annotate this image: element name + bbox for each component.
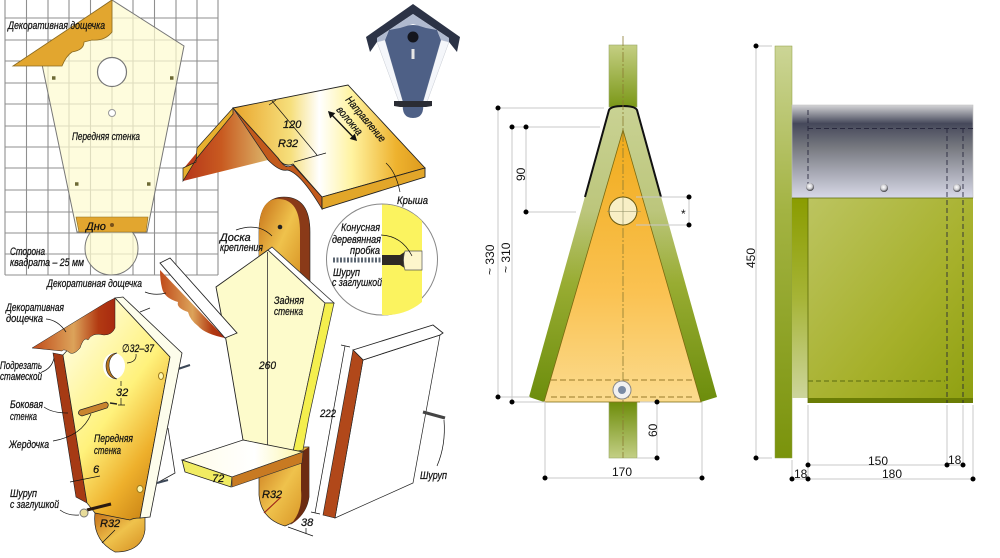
shelf top xyxy=(182,440,303,477)
label: 120: 120 xyxy=(283,119,302,131)
perch hole xyxy=(108,110,116,116)
hole interior xyxy=(106,353,117,379)
leader: roof xyxy=(386,163,400,192)
panel: back wall with mounting board xyxy=(182,197,334,536)
label: Декоративная дощечка xyxy=(45,278,142,290)
dimension 38 xyxy=(288,527,313,536)
plug xyxy=(404,251,422,270)
label: screw: Шуруп xyxy=(420,470,447,482)
panel: side view drawing xyxy=(744,46,973,481)
rounded foot xyxy=(95,513,145,552)
board thickness shading xyxy=(290,447,309,525)
magnifier circle xyxy=(326,204,438,315)
floor piece xyxy=(76,217,148,232)
label: screw: Шуруп xyxy=(10,488,37,500)
bolt xyxy=(613,381,631,399)
leader xyxy=(437,420,444,466)
light soffit xyxy=(377,14,449,42)
screw shank xyxy=(333,258,400,262)
label: screw 2: с заглушкой xyxy=(332,277,382,289)
orange panel xyxy=(544,130,701,402)
radius line xyxy=(102,530,115,543)
left strip xyxy=(792,198,808,398)
bolt core xyxy=(618,386,626,394)
panel: upper loose decorative plank xyxy=(45,258,237,338)
label: trim: Подрезать xyxy=(0,360,42,372)
roof thickness xyxy=(322,168,425,209)
label: front wall: Передняя стенка xyxy=(72,131,140,143)
label: screw 2: с заглушкой xyxy=(10,499,59,511)
roof top surface xyxy=(233,85,425,197)
floor screw xyxy=(110,223,114,227)
bolt 3 xyxy=(953,184,961,192)
dim 6 xyxy=(70,476,100,482)
dimension lines xyxy=(498,108,702,478)
white edge xyxy=(160,258,237,338)
perch xyxy=(78,402,108,416)
entrance hole xyxy=(103,353,125,379)
label: 450: 450 xyxy=(744,248,758,268)
label: grain direction: Направление xyxy=(343,94,388,145)
radius line xyxy=(264,497,281,513)
label: 260: 260 xyxy=(258,360,277,372)
leader: mounting board xyxy=(236,227,272,236)
label: roof: Крыша xyxy=(397,195,428,207)
shelf side xyxy=(232,452,303,487)
label: 18 right: 18 xyxy=(948,453,962,467)
white side boards xyxy=(377,40,449,102)
bolt 2 xyxy=(880,184,888,192)
back wall face xyxy=(216,250,325,452)
top edge xyxy=(353,325,443,360)
screw marks xyxy=(52,78,174,184)
leader xyxy=(53,414,91,441)
label: 38: 38 xyxy=(301,517,314,529)
white face xyxy=(335,335,440,518)
panel: blue birdhouse xyxy=(366,4,460,118)
panel: side wall part xyxy=(311,325,447,518)
top edge white xyxy=(268,247,334,303)
front face xyxy=(63,298,170,520)
mount top xyxy=(609,45,637,107)
roof front edge xyxy=(233,108,322,209)
label: perch: Жердочка xyxy=(8,439,49,451)
label: 32: 32 xyxy=(116,387,128,399)
mounting board face xyxy=(259,199,300,290)
label: 60: 60 xyxy=(646,423,660,437)
label: 180: 180 xyxy=(882,467,902,481)
decorative plank xyxy=(13,0,112,66)
label: 222: 222 xyxy=(319,408,336,420)
leader xyxy=(46,319,66,332)
label: R32: R32 xyxy=(278,138,298,150)
dimension dots xyxy=(756,46,973,479)
label: grain direction 2: волокна xyxy=(334,104,365,138)
screw xyxy=(423,412,445,418)
floor xyxy=(394,101,432,107)
label: 18 left: 18 xyxy=(794,467,808,481)
grid paper xyxy=(5,0,218,275)
mount board xyxy=(775,46,792,458)
label: back wall 2: стенка xyxy=(274,306,303,318)
green body xyxy=(808,198,973,403)
front wall outline xyxy=(39,0,184,232)
label: front wall: Передняя xyxy=(94,433,133,445)
edge line xyxy=(792,198,973,403)
plug xyxy=(80,509,88,517)
label: 330: ~ 330 xyxy=(483,244,497,275)
dashed lines xyxy=(808,110,973,403)
screw head xyxy=(382,251,406,269)
label: 25 mm: квадрата – 25 мм xyxy=(10,257,84,269)
roof xyxy=(366,4,460,52)
dimension 120 xyxy=(269,100,326,162)
label: plank 2: дощечка xyxy=(6,313,43,325)
leader xyxy=(42,358,54,372)
shelf front xyxy=(182,460,232,487)
bottom band xyxy=(808,398,973,403)
label: back wall: Задняя xyxy=(274,295,304,307)
panel: grid template of front wall xyxy=(5,0,218,275)
label: side wall: Боковая xyxy=(10,399,43,411)
label: 170: 170 xyxy=(612,465,632,479)
green side boards xyxy=(529,107,717,402)
label: 150: 150 xyxy=(868,454,888,468)
label: screw: Шуруп xyxy=(333,267,360,279)
label: decorative plank: Декоративная xyxy=(4,302,64,314)
roof edge xyxy=(585,106,661,197)
back wall lower board xyxy=(259,447,309,526)
label: plug 2: деревянная xyxy=(332,234,381,246)
label: side wall 2: стенка xyxy=(10,411,37,423)
arrow: grain xyxy=(329,112,356,140)
bolt 1 xyxy=(806,183,814,191)
dimension line 260 xyxy=(266,252,268,446)
hole xyxy=(408,32,418,42)
label: asterisk: * xyxy=(681,207,686,221)
plug screw xyxy=(87,504,111,510)
perch xyxy=(412,49,414,59)
panel: magnifier screw detail xyxy=(326,204,438,315)
dimension dots xyxy=(498,108,702,478)
perch screw xyxy=(110,403,117,404)
label: diameter: ∅32–37 xyxy=(122,343,155,355)
panel: roof part xyxy=(183,85,428,209)
mount bottom xyxy=(609,402,637,458)
leader xyxy=(145,292,166,294)
label: 90: 90 xyxy=(514,167,528,181)
decorative plank edge xyxy=(183,108,233,181)
mount circle xyxy=(85,222,138,275)
label: mounting board 2: крепления xyxy=(220,242,263,254)
label: decorative plank: Декоративная дощечка xyxy=(6,20,105,32)
dashed floor xyxy=(808,380,945,382)
decorative plank xyxy=(32,298,115,353)
label: mounting board: Доска xyxy=(218,232,251,244)
label: R32 lower: R32 xyxy=(262,489,282,501)
small screw holes xyxy=(158,372,164,380)
yellow edge xyxy=(293,303,334,452)
center line xyxy=(622,36,624,458)
rear wall outline xyxy=(140,308,175,483)
label: plug: Конусная xyxy=(341,222,380,234)
brown edge xyxy=(323,350,363,518)
screw hole xyxy=(278,225,282,229)
dimension line 222 xyxy=(311,345,350,514)
label: front wall 2: стенка xyxy=(94,445,121,457)
panel: assembled front wall xyxy=(0,297,190,552)
label: plug 3: пробка xyxy=(350,245,380,257)
label: trim 2: стамеской xyxy=(0,371,42,383)
leader xyxy=(60,510,79,515)
leader xyxy=(127,354,136,363)
leader xyxy=(381,235,412,256)
entrance hole xyxy=(609,197,637,225)
label: R32: R32 xyxy=(100,518,120,530)
dashed floor lines xyxy=(551,380,695,397)
plank surface xyxy=(160,270,225,338)
hole cross xyxy=(607,197,641,225)
entrance hole xyxy=(98,58,126,86)
mounting board top xyxy=(259,197,310,290)
dimension 32 xyxy=(118,381,125,405)
label: grid square: Сторона xyxy=(10,246,45,258)
dimension lines xyxy=(756,46,973,479)
leader xyxy=(44,407,68,413)
label: 6: 6 xyxy=(93,464,100,476)
label: 310: ~ 310 xyxy=(499,242,513,273)
blue body xyxy=(385,25,441,118)
label: 72: 72 xyxy=(212,473,224,485)
gable triangle xyxy=(183,109,268,181)
wood section xyxy=(382,204,422,315)
white right edge xyxy=(115,297,182,518)
panel: front view drawing xyxy=(483,36,717,479)
brown side xyxy=(53,353,87,503)
label: bottom: Дно xyxy=(84,221,106,233)
rear screws xyxy=(157,365,190,483)
metal roof xyxy=(792,105,973,198)
